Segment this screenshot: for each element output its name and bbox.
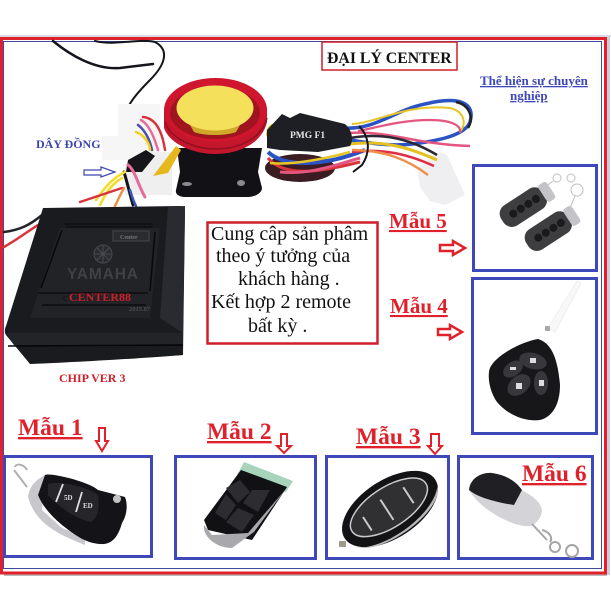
- panel: Mẫu 3 remote: [326, 455, 451, 563]
- slogan: Thể hiện sự chuyên: [480, 73, 589, 88]
- wire bundle right: [265, 101, 471, 205]
- label Mẫu 5: Mẫu 5: [389, 209, 447, 233]
- text block: offer: Cung câp sản phâm: [211, 223, 369, 245]
- label Mẫu 3: Mẫu 3: [356, 424, 421, 450]
- fuse: [153, 146, 181, 176]
- label Mẫu 1: Mẫu 1: [18, 415, 83, 441]
- chip box: YAMAHA: [67, 266, 138, 283]
- panel: Mẫu 1 remote: ED: [83, 502, 93, 510]
- panel: Mẫu 1 remote: [4, 456, 152, 556]
- arrow Mẫu 1: [96, 428, 108, 451]
- panel: Mẫu 5 remote: [474, 166, 596, 270]
- panel: Mẫu 4 remote: [472, 278, 596, 434]
- panel: Mẫu 1 remote: 5D: [64, 494, 73, 502]
- tie: [353, 126, 368, 172]
- arrow Mẫu 4: [438, 325, 462, 339]
- chip box: 2015.07: [129, 306, 151, 313]
- panel: Mẫu 2 remote: [176, 456, 316, 558]
- title: ĐẠI LÝ CENTER: [327, 48, 452, 67]
- chip box: [5, 206, 185, 364]
- siren wire bundle: [4, 117, 172, 247]
- text block: offer: theo ý tưởng của: [216, 245, 350, 267]
- panel: Mẫu 6 remote: [458, 456, 592, 558]
- arrow: dây đồng: [84, 167, 115, 177]
- text block: offer: Kết hợp 2 remote: [211, 291, 351, 313]
- text block: offer: [208, 222, 378, 344]
- text block: offer: bất kỳ .: [248, 315, 307, 337]
- PMG F1 module: [267, 113, 352, 152]
- label: dây đồng: DÂY ĐỒNG: [36, 136, 101, 151]
- icon: siren: [153, 78, 267, 197]
- arrow Mẫu 5: [440, 241, 465, 255]
- text block: offer: khách hàng .: [238, 268, 340, 290]
- white connector, left: [102, 104, 160, 160]
- loose black wires: [53, 41, 164, 150]
- wire loop: [345, 101, 471, 145]
- slogan: nghiệp: [510, 88, 548, 103]
- PMG F1 module: PMG F1: [290, 131, 325, 141]
- chip box: Center: [120, 235, 138, 241]
- slogan: [480, 73, 589, 103]
- arrow Mẫu 2: [277, 434, 291, 453]
- connector: [417, 152, 465, 205]
- label Mẫu 4: Mẫu 4: [390, 294, 448, 318]
- label Mẫu 2: Mẫu 2: [207, 419, 272, 445]
- label Mẫu 6: Mẫu 6: [522, 461, 587, 487]
- title: [322, 42, 457, 70]
- arrow Mẫu 3: [428, 434, 442, 454]
- chip box: c: [63, 292, 68, 304]
- chip caption: CHIP VER 3: [59, 371, 125, 385]
- chip box: CENTER88: [69, 290, 131, 304]
